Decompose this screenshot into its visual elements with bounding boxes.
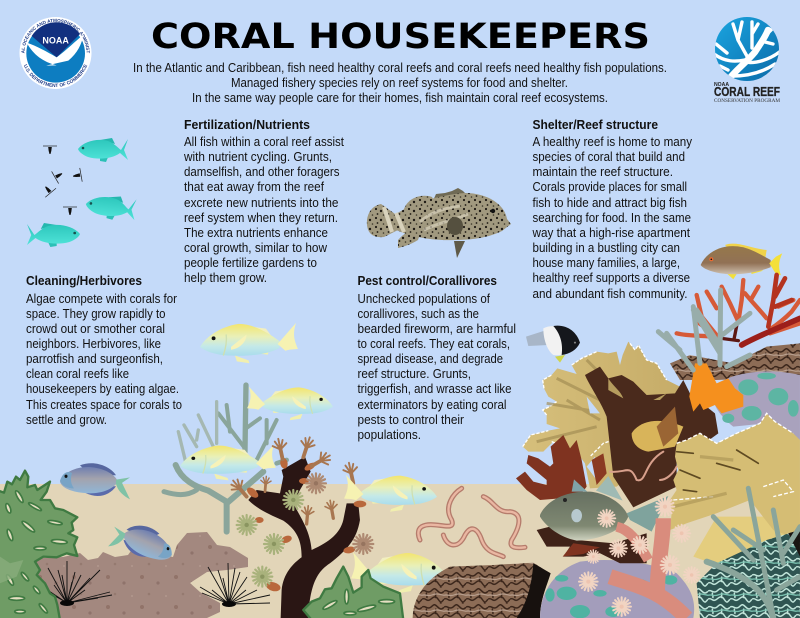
pale coral, bottom right xyxy=(707,488,800,618)
text block: Fertilization/Nutrients: damselfish, and other foragers xyxy=(184,165,340,179)
text block: Fertilization/Nutrients: All fish within a coral reef assist xyxy=(184,135,344,149)
intro text: Managed fishery species rely on reef systems for food and shelter. xyxy=(231,76,568,90)
tan fan coral, left xyxy=(523,342,690,488)
text block: Shelter/Reef structure: way that a high-rise apartment xyxy=(532,226,690,240)
text block: Shelter/Reef structure: house many families, a large, xyxy=(532,256,680,270)
dark brown coral, upper right cluster xyxy=(585,367,718,507)
text block: Pest control/Corallivores: populations. xyxy=(358,428,421,442)
text block: Fertilization/Nutrients: The extra nutrients enhance xyxy=(184,226,328,240)
text block: Fertilization/Nutrients: reef system when they return. xyxy=(184,211,338,225)
green sea fan, left xyxy=(0,471,77,618)
text block: Cleaning/Herbivores: Algae compete with corals for xyxy=(26,292,177,306)
logo: NOAA Coral Reef Conservation Program: CORAL REEF xyxy=(714,85,780,99)
text block: Shelter/Reef structure: healthy reef supports a diverse xyxy=(532,271,690,285)
text block: Pest control/Corallivores: Unchecked populations of xyxy=(358,292,490,306)
text block: Pest control/Corallivores: triggerfish, and wrasse act like xyxy=(358,382,512,396)
fireworms xyxy=(418,488,525,557)
text block: Cleaning/Herbivores: settle and grow. xyxy=(26,413,107,427)
text block: Pest control/Corallivores: reef structure. Grunts, xyxy=(358,367,471,381)
logo: NOAA Coral Reef Conservation Program: CONSERVATION PROGRAM xyxy=(714,99,781,104)
orange coral xyxy=(689,363,743,413)
dark brown coral under triggerfish xyxy=(537,527,647,563)
brain coral, bottom centre xyxy=(413,563,551,618)
brown brain coral, top right xyxy=(670,343,800,380)
text block: Shelter/Reef structure: building in a bustling city can xyxy=(532,241,680,255)
text block: Pest control/Corallivores: corallivores, such as the xyxy=(358,307,479,321)
yellow fan coral, right xyxy=(670,413,800,577)
green sea fan, bottom centre xyxy=(303,567,403,618)
purple-teal coral dome, bottom xyxy=(540,560,694,618)
logo: NOAA: NOAA xyxy=(42,36,69,46)
purple-teal coral dome, upper right xyxy=(712,371,800,440)
grunts lower xyxy=(344,475,447,593)
text block: Fertilization/Nutrients: help them grow. xyxy=(184,271,267,285)
text block: Fertilization/Nutrients: with nutrient cycling. Grunts, xyxy=(183,150,332,164)
text block: Pest control/Corallivores: bearded fireworm, are harmful xyxy=(358,322,516,336)
dark brown coral with polyps xyxy=(228,435,373,618)
text block: Shelter/Reef structure: A healthy reef is home to many xyxy=(532,135,693,149)
heading: Cleaning/Herbivores: Cleaning/Herbivores xyxy=(26,273,142,288)
text block: Cleaning/Herbivores: neighbors. Herbivores, like xyxy=(26,337,161,351)
text block: Shelter/Reef structure: searching for food. In the same xyxy=(532,211,691,225)
text block: Cleaning/Herbivores: parrotfish and surgeonfish, xyxy=(26,352,163,366)
black and white damselfish xyxy=(526,326,580,363)
text block: Shelter/Reef structure: Corals provide places for small xyxy=(532,180,687,194)
copepods xyxy=(40,146,82,215)
text block: Shelter/Reef structure: maintain the reef structure. xyxy=(532,165,673,179)
text block: Shelter/Reef structure: and abundant fish community. xyxy=(532,287,688,301)
heading: Shelter/Reef structure: Shelter/Reef structure xyxy=(532,117,658,132)
text block: Cleaning/Herbivores: clean coral reefs like xyxy=(26,367,129,381)
heading: Pest control/Corallivores: Pest control/Corallivores xyxy=(358,273,497,288)
reddish-brown coral xyxy=(516,435,607,500)
text block: Pest control/Corallivores xyxy=(358,273,516,442)
text block: Pest control/Corallivores: spread disease, and degrade xyxy=(358,352,503,366)
yellow grunts xyxy=(180,323,333,480)
text block: Shelter/Reef structure: fish to hide and attract big fish xyxy=(532,196,687,210)
sea urchins xyxy=(40,561,270,607)
surgeonfish xyxy=(60,463,177,572)
intro text xyxy=(133,61,667,105)
text block: Cleaning/Herbivores: crowd out or smother coral xyxy=(26,322,165,336)
pink coral with polyps xyxy=(579,497,700,618)
text block: Cleaning/Herbivores: housekeepers by eating algae. xyxy=(26,382,179,396)
triggerfish xyxy=(540,476,668,541)
text block: Shelter/Reef structure: species of coral that build and xyxy=(532,150,685,164)
text block: Fertilization/Nutrients xyxy=(183,117,344,285)
text block: Cleaning/Herbivores: space. They grow rapidly to xyxy=(26,307,166,321)
title: CORAL HOUSEKEEPERS xyxy=(151,17,650,57)
red branching coral xyxy=(677,275,800,345)
text block: Fertilization/Nutrients: excrete new nutrients into the xyxy=(184,196,338,210)
text block: Pest control/Corallivores: exterminators by eating coral xyxy=(358,398,506,412)
pale coral, upper right xyxy=(658,290,750,370)
grouper fish xyxy=(367,188,511,258)
text block: Cleaning/Herbivores: This creates space for corals to xyxy=(26,398,182,412)
text block: Fertilization/Nutrients: that eat away from the reef xyxy=(184,180,324,194)
text block: Cleaning/Herbivores xyxy=(26,273,182,427)
logo: NOAA Coral Reef Conservation Program: NOAA xyxy=(714,82,729,88)
text block: Pest control/Corallivores: to coral reefs. They eat corals, xyxy=(358,337,510,351)
logo: NOAA Coral Reef Conservation Program xyxy=(714,17,782,104)
brown snapper xyxy=(701,244,782,279)
teal-white brain coral, bottom right xyxy=(697,530,800,618)
text block: Fertilization/Nutrients: coral growth, similar to how xyxy=(184,241,328,255)
logo: NOAA: U.S. DEPARTMENT OF COMMERCE xyxy=(24,64,88,87)
text block: Pest control/Corallivores: pests to control their xyxy=(358,413,464,427)
pale grey-green branching coral, centre xyxy=(164,385,287,532)
heading: Fertilization/Nutrients: Fertilization/Nutrients xyxy=(184,117,310,132)
rubble rock xyxy=(28,532,248,618)
logo: NOAA xyxy=(20,17,92,89)
intro text: In the same way people care for their homes, fish maintain coral reef ecosystems. xyxy=(192,91,608,105)
intro text: In the Atlantic and Caribbean, fish need healthy coral reefs and coral reefs need healthy fish populations. xyxy=(133,61,667,75)
teal damselfish school xyxy=(27,138,137,247)
text block: Shelter/Reef structure xyxy=(532,117,693,301)
sand seabed xyxy=(0,484,800,618)
text block: Fertilization/Nutrients: people fertilize gardens to xyxy=(184,256,317,270)
